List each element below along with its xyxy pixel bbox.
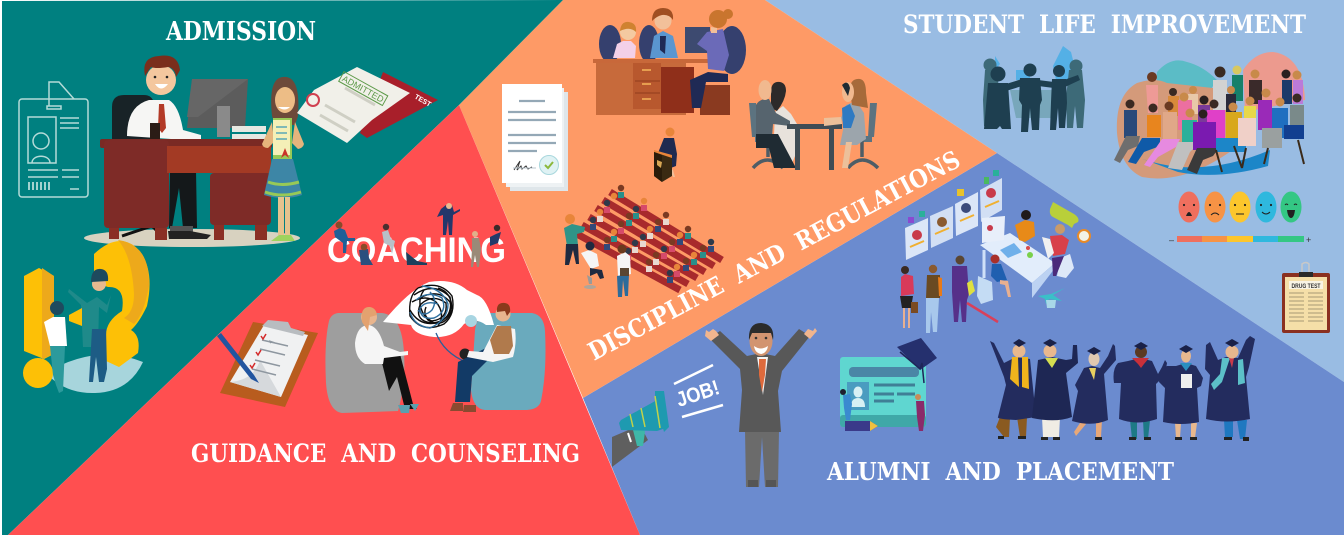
icon: graduate ID card: [840, 338, 937, 431]
panel: alumni and placement background: [583, 153, 1344, 535]
computer monitor: [187, 79, 248, 128]
illustration: isometric recruitment desk: [900, 170, 1090, 333]
table: [787, 124, 842, 129]
illustration: business meeting at table: [749, 79, 878, 170]
audience bodies: [593, 192, 711, 283]
desk: [100, 139, 272, 148]
face: very happy: [1280, 192, 1302, 222]
panel: admission background: [2, 0, 563, 535]
chart: mood faces rating scale: [1169, 192, 1311, 245]
person: applicant: [613, 22, 636, 58]
graduate 5: [1159, 345, 1203, 440]
illustration: six celebrating graduates: [990, 336, 1255, 441]
recruiter in red: [1042, 224, 1074, 278]
candidate in blue chair: [977, 254, 1011, 304]
face: happy: [1256, 192, 1276, 222]
queue: man in brown: [926, 265, 942, 333]
illustration: admitted letter and test folder: TEST: [413, 94, 433, 109]
illustration: panel interview at office desk: [593, 8, 746, 115]
illustration: auditorium with audience and photographers: [564, 185, 722, 297]
officer: [127, 56, 211, 239]
panel: discipline and regulations background: [459, 0, 997, 398]
face: unhappy: [1204, 192, 1226, 222]
interviewee from behind: [690, 9, 746, 115]
person: interviewer: [650, 8, 678, 58]
scale bar: –: [1169, 235, 1174, 245]
computer screen: [685, 27, 710, 53]
queue: woman in red: [900, 266, 918, 328]
audience heads: [590, 185, 714, 276]
candidate profile cards: [905, 170, 1002, 260]
recruitment table: [980, 233, 1055, 283]
scale bar: +: [1306, 235, 1311, 245]
speech bubble: [1050, 202, 1078, 228]
chairs: [749, 103, 877, 137]
illustration: admission desk scene: [84, 56, 304, 247]
graduate 6: [1205, 336, 1255, 441]
photographer: standing: [617, 244, 631, 297]
icon: megaphone with hand: [612, 391, 669, 467]
graduate 3: [1072, 344, 1116, 440]
photographer: seated: [581, 242, 604, 289]
heading: coaching: COACHING: [327, 231, 506, 270]
illustration: speaker at podium: [654, 128, 677, 182]
icon: signed document stack: [502, 84, 568, 191]
heading: discipline and regulations: DISCIPLINE AND REGULATIONS: [583, 145, 965, 366]
panel: student life improvement background: [765, 0, 1344, 382]
badge tag: [1078, 230, 1090, 242]
middle row: [1178, 88, 1304, 142]
illustration: seated diverse crowd: [1114, 52, 1305, 178]
queue: man in purple: [952, 256, 975, 322]
desk chair: [112, 95, 154, 139]
face: very unhappy: [1178, 192, 1200, 222]
illustration: coaching small figures: [334, 203, 501, 267]
right armchair: [471, 313, 546, 410]
graduate 4: [1114, 342, 1167, 440]
text: job callout: [673, 365, 723, 417]
client: [355, 307, 419, 413]
panel: guidance and counseling background: [8, 105, 640, 535]
icon: drug test clipboard: DRUG TEST: [1292, 283, 1321, 290]
seat rows: [575, 192, 722, 290]
front row seated: [1114, 100, 1304, 174]
illustration: happy man in suit: [705, 323, 817, 487]
illustration: counseling session: [325, 281, 546, 413]
scale bar: [1169, 235, 1311, 245]
counselor: [450, 303, 516, 412]
photographer: teal shirt: [564, 214, 585, 265]
potted plant: [1038, 288, 1065, 308]
figure: man: [68, 269, 111, 382]
thought bubble: [383, 281, 494, 337]
icon: drug test clipboard: [1282, 262, 1330, 333]
left armchair: [325, 313, 404, 413]
people right: [824, 79, 868, 168]
face: neutral: [1230, 192, 1250, 222]
graduate 1: [990, 339, 1036, 439]
heading: admission: ADMISSION: [165, 17, 316, 47]
student with certificate: [262, 77, 304, 241]
illustration: question mark with two figures: [23, 240, 150, 393]
heading: alumni and placement: ALUMNI AND PLACEMENT: [826, 457, 1174, 486]
recruiter in orange: [1015, 210, 1035, 242]
illustration: silhouette group huddle: [983, 46, 1085, 132]
man left: [756, 80, 796, 168]
illustration: clipboard and pen: [217, 320, 318, 407]
heading: guidance and counseling: GUIDANCE AND COUNSELING: [191, 439, 580, 468]
figure: woman with megaphone: [44, 301, 82, 393]
icon: ID badge outline: [19, 82, 88, 197]
woman left: [774, 106, 799, 166]
illustration: admitted letter and test folder: ADMITTED: [340, 73, 386, 105]
text: job callout: JOB!: [673, 376, 722, 412]
graduate 2: [1032, 339, 1078, 440]
illustration: admitted letter and test folder: [297, 67, 438, 143]
back row standing: [1146, 66, 1303, 116]
